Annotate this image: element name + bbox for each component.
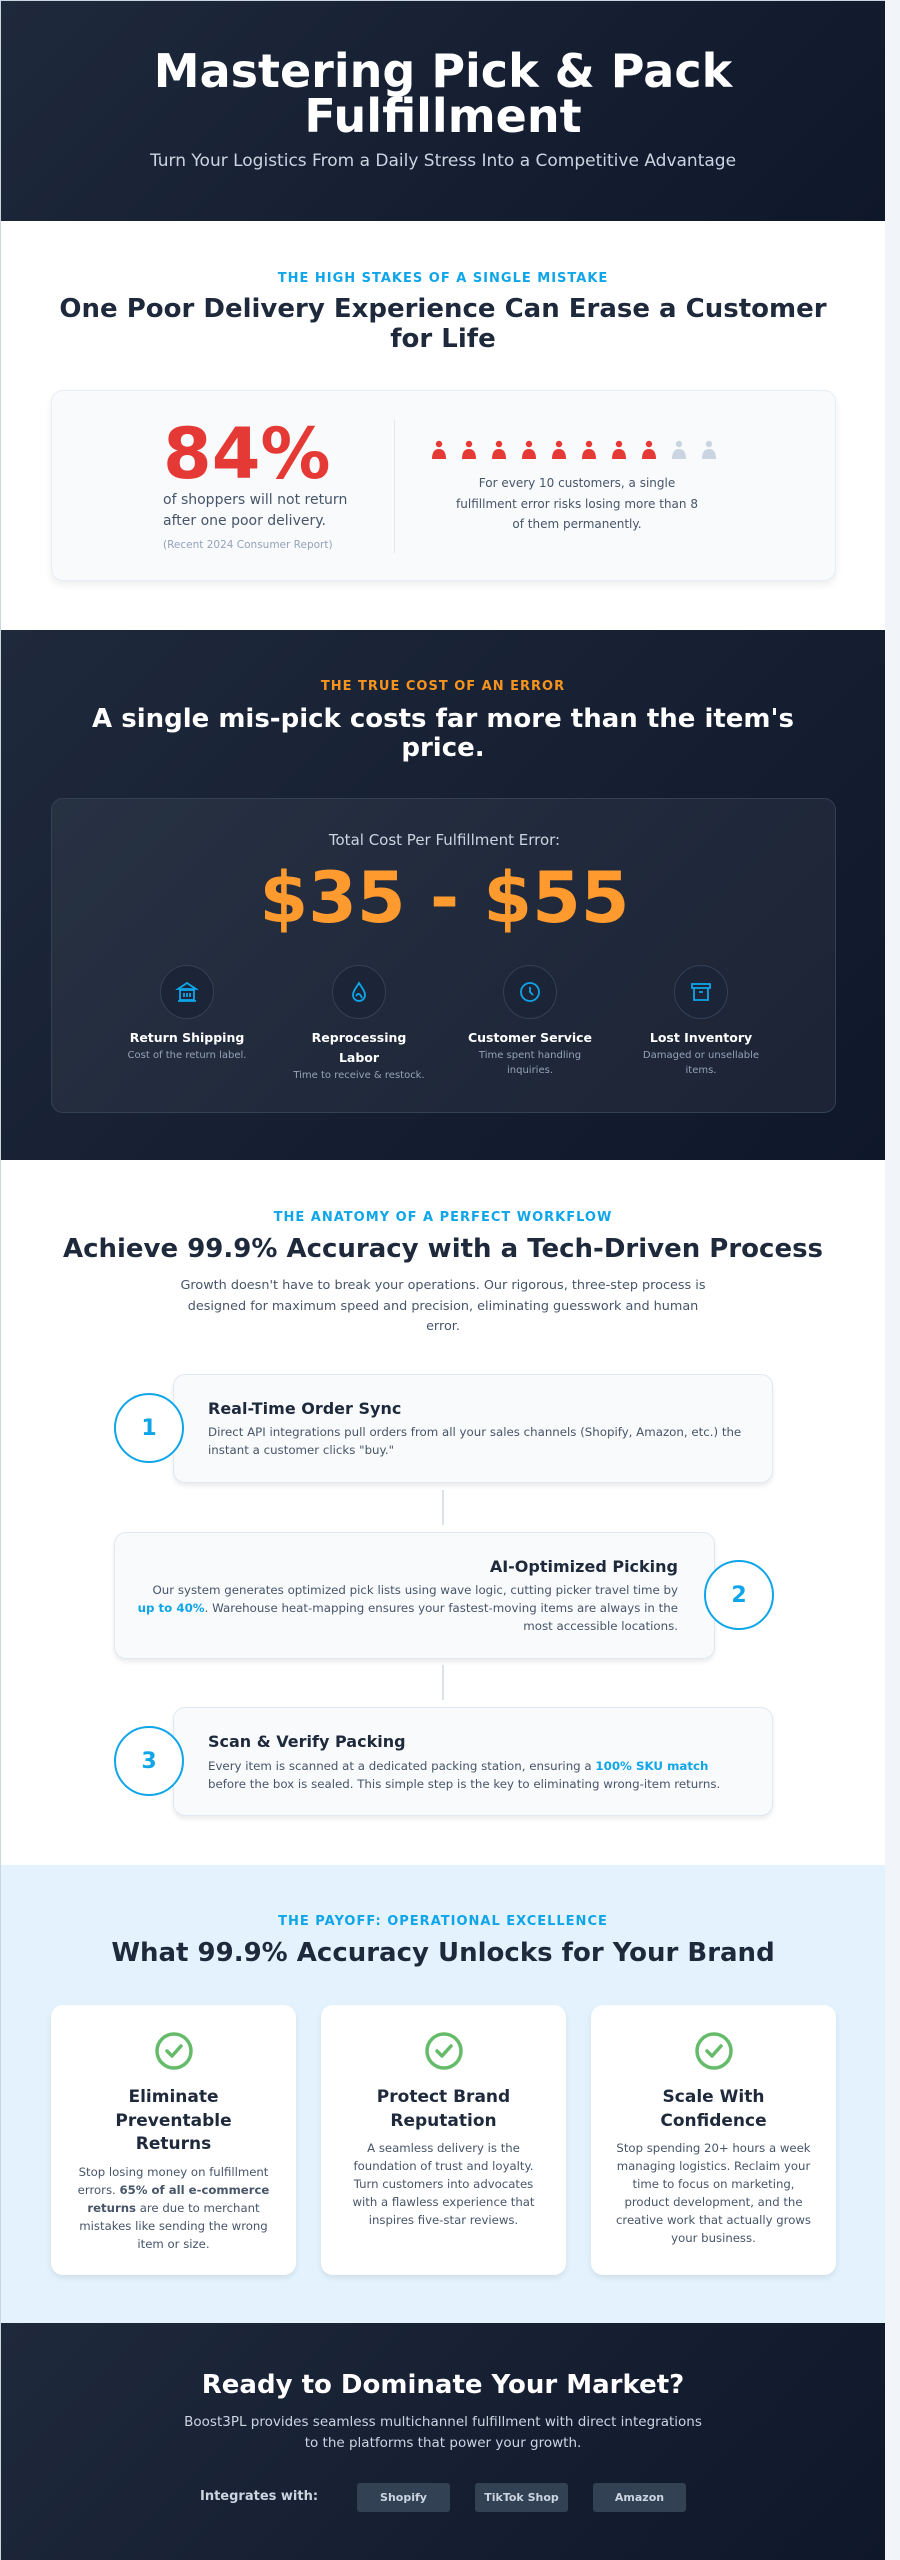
text: managing logistics. Reclaim your bbox=[617, 2159, 810, 2173]
text bbox=[78, 2165, 269, 2251]
people caption bbox=[456, 476, 698, 531]
icon: check bbox=[425, 2032, 463, 2070]
text: inspires five-star reviews. bbox=[369, 2213, 518, 2227]
text: returns are due to merchant bbox=[87, 2201, 260, 2215]
text: with a flawless experience that bbox=[352, 2195, 535, 2209]
label: lost inventory bbox=[643, 1030, 759, 1076]
section: payoff bbox=[1, 1865, 885, 2323]
text: A seamless delivery is the bbox=[367, 2141, 520, 2155]
benefit card 3 bbox=[591, 2005, 836, 2275]
heading: One Poor Delivery Experience Can Erase a Customer bbox=[59, 294, 827, 324]
intro paragraph: Growth doesn't have to break your operations. Our rigorous, three-step process is bbox=[180, 1278, 706, 1293]
title bbox=[154, 44, 733, 143]
heading: Achieve 99.9% Accuracy with a Tech-Driven Process bbox=[63, 1234, 823, 1264]
title: Eliminate bbox=[128, 2087, 219, 2107]
step 2 text: Our system generates optimized pick lists using wave logic, cutting picker travel time by bbox=[152, 1583, 678, 1597]
step 1 title: Real-Time Order Sync bbox=[208, 1399, 401, 1418]
label: customer service: inquiries. bbox=[507, 1065, 553, 1076]
step 1 text: instant a customer clicks "buy." bbox=[208, 1443, 394, 1457]
label: lost inventory: Damaged or unsellable bbox=[643, 1050, 759, 1061]
heading bbox=[59, 294, 827, 354]
icon: lost inventory box bbox=[674, 965, 728, 1019]
label: customer service: Customer Service bbox=[468, 1030, 592, 1045]
step 2 text bbox=[138, 1583, 678, 1633]
label: lost inventory: items. bbox=[686, 1065, 716, 1076]
header bbox=[1, 1, 885, 221]
step 2 number bbox=[704, 1560, 774, 1630]
title: Reputation bbox=[390, 2110, 497, 2130]
badge: shopify bbox=[357, 2483, 450, 2512]
step 1 number bbox=[114, 1393, 184, 1463]
integrates label: Integrates with: bbox=[200, 2489, 318, 2504]
text: creative work that actually grows bbox=[616, 2213, 811, 2227]
label: return shipping: Cost of the return label. bbox=[128, 1050, 246, 1061]
title bbox=[115, 2087, 232, 2154]
people icons bbox=[432, 440, 716, 459]
heading: price. bbox=[401, 733, 485, 763]
step 2 text: most accessible locations. bbox=[523, 1619, 678, 1633]
step 3 title: Scan & Verify Packing bbox=[208, 1732, 406, 1751]
text: your business. bbox=[671, 2231, 756, 2245]
step 1 bbox=[114, 1374, 774, 1486]
step 1 number: 1 bbox=[141, 1416, 157, 1440]
label: return shipping bbox=[128, 1030, 246, 1061]
step 3 text bbox=[208, 1759, 720, 1791]
footer text bbox=[184, 2414, 702, 2451]
heading: A single mis-pick costs far more than the item's bbox=[92, 704, 794, 734]
stat description: of shoppers will not return bbox=[163, 492, 347, 508]
badge: amazon: Amazon bbox=[615, 2491, 664, 2504]
step 2 text: up to 40%. Warehouse heat-mapping ensures your fastest-moving items are always in the bbox=[138, 1601, 678, 1615]
text: time to focus on marketing, bbox=[632, 2177, 794, 2191]
text: foundation of trust and loyalty. bbox=[354, 2159, 533, 2173]
icon: customer service clock bbox=[503, 965, 557, 1019]
title: Preventable bbox=[115, 2110, 232, 2130]
text: item or size. bbox=[137, 2237, 210, 2251]
badge: tiktok: TikTok Shop bbox=[484, 2491, 559, 2504]
badge: shopify: Shopify bbox=[380, 2491, 427, 2504]
step 2 bbox=[114, 1532, 774, 1662]
section: true cost bbox=[1, 630, 885, 1160]
eyebrow: THE HIGH STAKES OF A SINGLE MISTAKE bbox=[278, 271, 608, 286]
footer CTA bbox=[1, 2323, 885, 2560]
title: Fulfillment bbox=[304, 89, 582, 143]
step 3 number bbox=[114, 1726, 184, 1796]
cost range: $35 - $55 bbox=[259, 857, 630, 939]
stat description bbox=[163, 492, 347, 529]
title: Scale With bbox=[663, 2087, 764, 2107]
title: Protect Brand bbox=[377, 2087, 510, 2107]
eyebrow: THE TRUE COST OF AN ERROR bbox=[321, 679, 565, 694]
step 1 text: Direct API integrations pull orders from all your sales channels (Shopify, Amazon, etc.) the bbox=[208, 1425, 741, 1439]
icon: check bbox=[155, 2032, 193, 2070]
footer text: to the platforms that power your growth. bbox=[305, 2435, 581, 2451]
heading bbox=[92, 704, 794, 763]
step 1 text bbox=[208, 1425, 741, 1457]
title bbox=[377, 2087, 510, 2130]
people caption: of them permanently. bbox=[512, 517, 642, 531]
badge: tiktok bbox=[475, 2483, 568, 2512]
label: reprocessing labor: Reprocessing bbox=[312, 1030, 406, 1045]
text: Stop losing money on fulfillment bbox=[79, 2165, 268, 2179]
label: customer service: Time spent handling bbox=[479, 1050, 581, 1061]
footer heading: Ready to Dominate Your Market? bbox=[202, 2370, 684, 2400]
eyebrow: THE PAYOFF: OPERATIONAL EXCELLENCE bbox=[278, 1914, 608, 1929]
badge: amazon bbox=[593, 2483, 686, 2512]
cost card bbox=[51, 798, 836, 1113]
people caption: For every 10 customers, a single bbox=[479, 476, 675, 490]
label: lost inventory: Lost Inventory bbox=[650, 1030, 752, 1045]
footer text: Boost3PL provides seamless multichannel fulfillment with direct integrations bbox=[184, 2414, 702, 2430]
title bbox=[660, 2087, 767, 2130]
big stat 84%: 84% bbox=[163, 413, 331, 495]
text: product development, and the bbox=[624, 2195, 803, 2209]
cost label: Total Cost Per Fulfillment Error: bbox=[329, 831, 560, 849]
source: (Recent 2024 Consumer Report) bbox=[163, 539, 333, 551]
text bbox=[352, 2141, 535, 2227]
stat description: after one poor delivery. bbox=[163, 513, 326, 529]
benefit card 1 bbox=[51, 2005, 296, 2275]
eyebrow: THE ANATOMY OF A PERFECT WORKFLOW bbox=[274, 1210, 612, 1225]
label: reprocessing labor: Labor bbox=[339, 1050, 379, 1065]
step 3 text: before the box is sealed. This simple step is the key to eliminating wrong-item returns. bbox=[208, 1777, 720, 1791]
subtitle: Turn Your Logistics From a Daily Stress Into a Competitive Advantage bbox=[150, 151, 736, 171]
step 2 number: 2 bbox=[731, 1582, 747, 1608]
title: Confidence bbox=[660, 2110, 767, 2130]
section: high stakes bbox=[1, 221, 885, 630]
text: Stop spending 20+ hours a week bbox=[616, 2141, 811, 2155]
step 3 number: 3 bbox=[141, 1748, 157, 1774]
label: return shipping: Return Shipping bbox=[130, 1030, 244, 1045]
intro paragraph: error. bbox=[426, 1319, 460, 1334]
section: workflow bbox=[1, 1160, 885, 1865]
title: Mastering Pick & Pack bbox=[154, 44, 732, 98]
intro paragraph: designed for maximum speed and precision, eliminating guesswork and human bbox=[188, 1298, 698, 1314]
heading: What 99.9% Accuracy Unlocks for Your Brand bbox=[111, 1938, 775, 1968]
heading: for Life bbox=[390, 324, 496, 354]
title: Returns bbox=[136, 2134, 211, 2154]
icon: reprocessing labor bbox=[332, 965, 386, 1019]
icon: check bbox=[695, 2032, 733, 2070]
step 3 text: Every item is scanned at a dedicated packing station, ensuring a 100% SKU match bbox=[208, 1759, 708, 1773]
stat card bbox=[51, 390, 836, 581]
benefit card 2 bbox=[321, 2005, 566, 2275]
label: reprocessing labor bbox=[293, 1030, 425, 1081]
text: mistakes like sending the wrong bbox=[79, 2219, 268, 2233]
label: customer service bbox=[468, 1030, 592, 1076]
text: Turn customers into advocates bbox=[354, 2177, 533, 2191]
step 3 bbox=[114, 1707, 774, 1820]
label: reprocessing labor: Time to receive & restock. bbox=[293, 1070, 425, 1081]
text bbox=[616, 2141, 811, 2245]
intro paragraph bbox=[180, 1278, 706, 1334]
step 2 title: AI-Optimized Picking bbox=[490, 1557, 678, 1576]
icon: return shipping bbox=[160, 965, 214, 1019]
people caption: fulfillment error risks losing more than 8 bbox=[456, 496, 698, 510]
text: errors. 65% of all e-commerce bbox=[78, 2183, 269, 2197]
